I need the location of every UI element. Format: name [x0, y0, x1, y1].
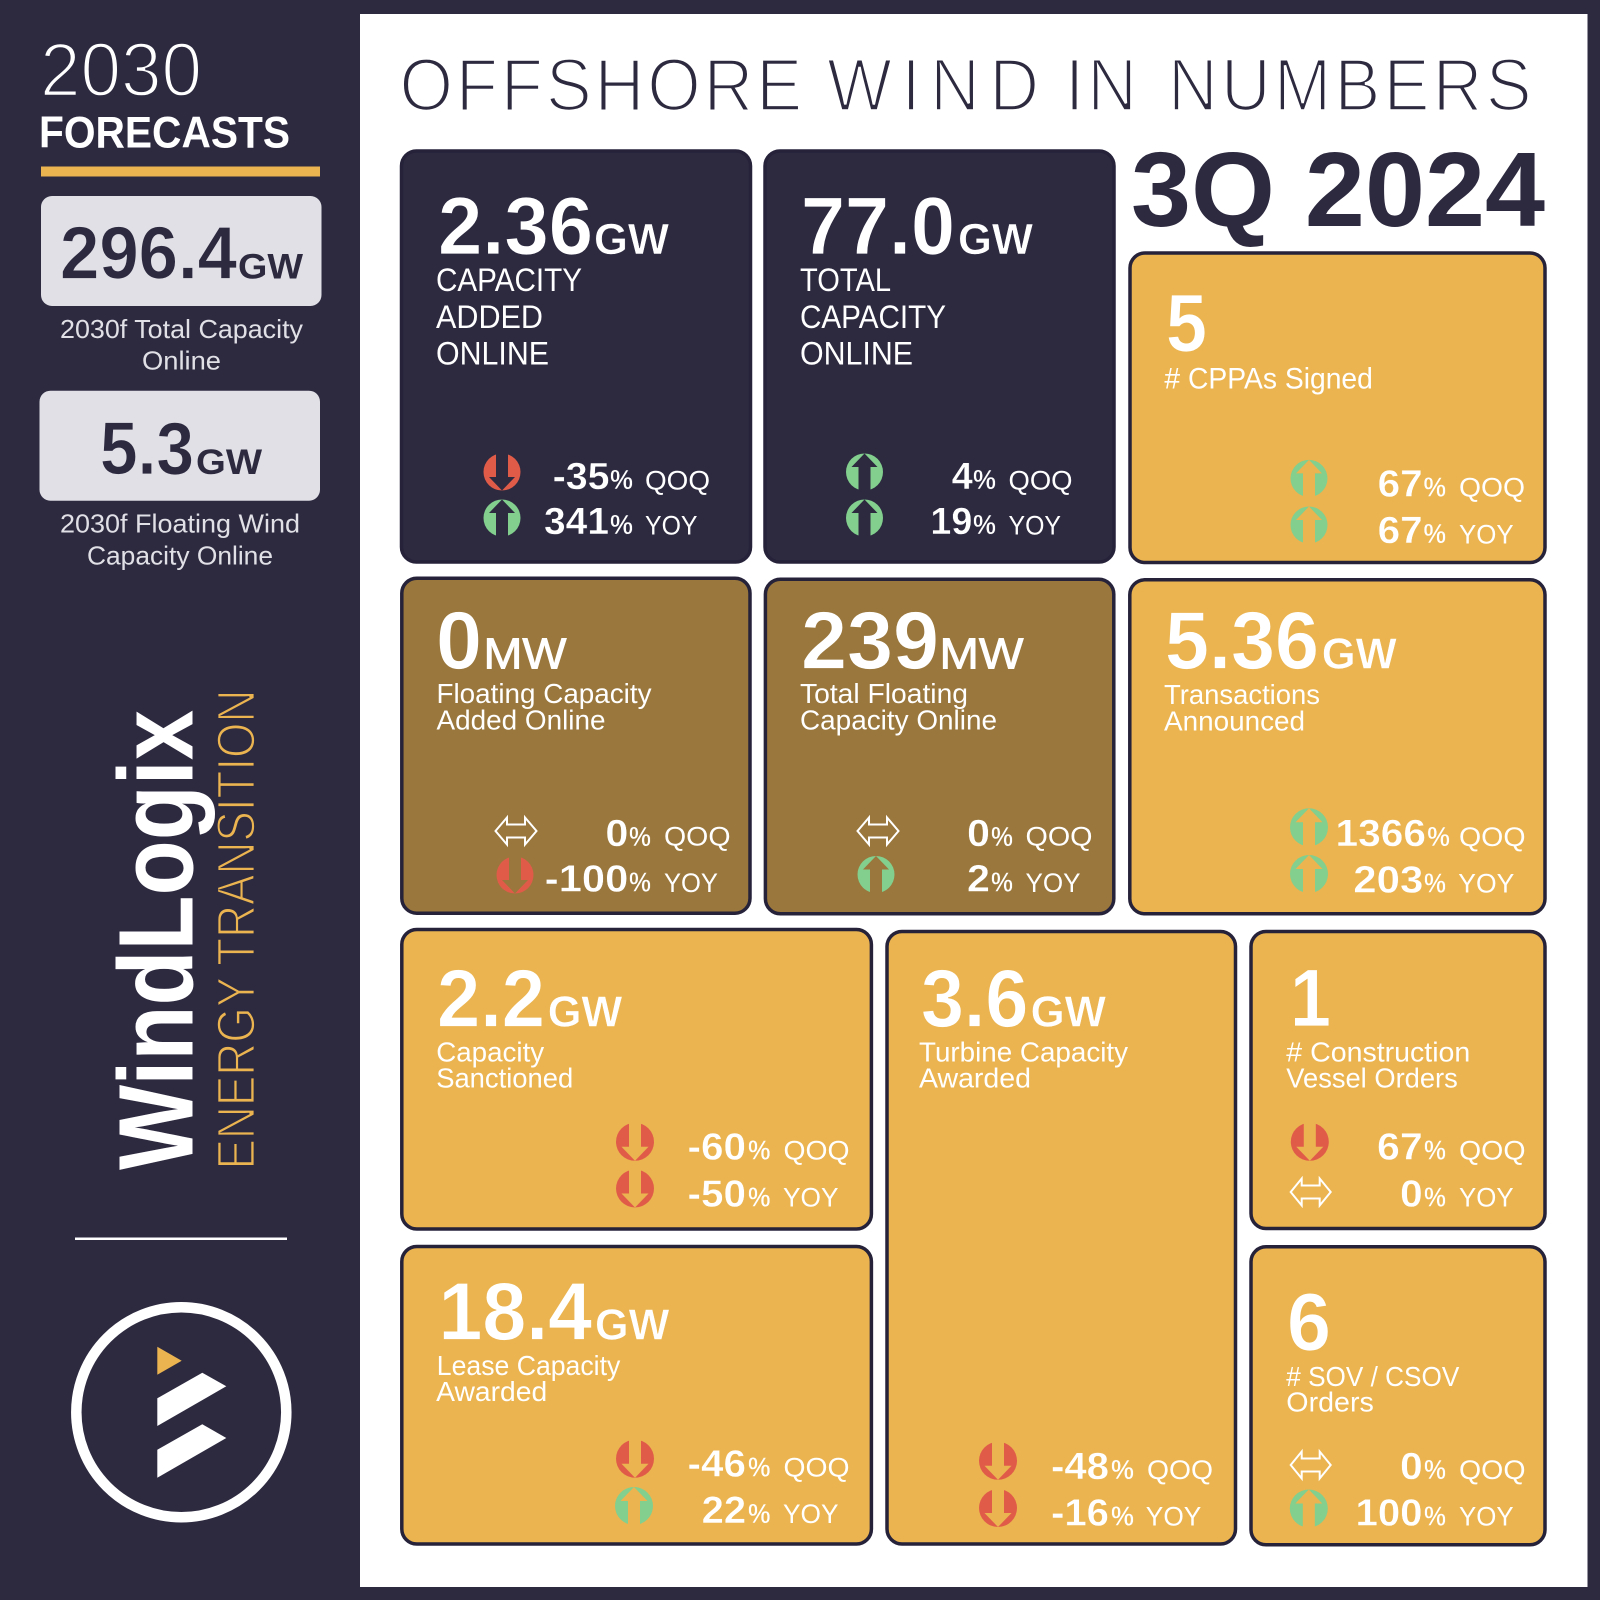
description — [436, 262, 582, 372]
description: Added Online — [436, 704, 606, 735]
title: NUMBERS — [1168, 44, 1532, 127]
value: GW — [1031, 988, 1106, 1036]
value: 239 — [801, 596, 939, 686]
YOY stat — [484, 500, 698, 543]
QOQ stat — [616, 1122, 850, 1168]
QOQ stat: % — [973, 464, 996, 495]
value: GW — [594, 215, 669, 264]
description: Total Floating — [800, 678, 968, 709]
YOY stat — [858, 856, 1080, 900]
description — [800, 678, 997, 735]
sidebar heading — [39, 28, 290, 157]
value: 77.0 — [801, 181, 955, 272]
QOQ stat: % — [1424, 1134, 1446, 1166]
forecast box: floating wind — [40, 391, 320, 501]
YOY stat: % — [991, 866, 1013, 898]
YOY stat: YOY — [1459, 1502, 1514, 1532]
value — [436, 596, 567, 686]
forecast caption: floating wind: 2030f Floating Wind — [60, 509, 300, 539]
YOY stat: YOY — [1459, 519, 1514, 549]
YOY stat: % — [1424, 868, 1446, 898]
title — [400, 44, 1532, 127]
panel: transactions announced — [1130, 580, 1545, 914]
value: 5.36 — [1165, 596, 1319, 686]
description: # CPPAs Signed — [1164, 362, 1373, 395]
description: CAPACITY — [800, 299, 946, 335]
sidebar heading: 2030 — [40, 28, 202, 113]
panel: total capacity online — [765, 151, 1114, 562]
YOY stat — [979, 1488, 1201, 1534]
description: CAPACITY — [436, 262, 582, 298]
QOQ stat: 0 — [967, 813, 990, 855]
description: Announced — [1164, 706, 1305, 737]
description: Capacity Online — [800, 704, 997, 735]
title: IN — [1065, 44, 1137, 127]
description — [1286, 1361, 1460, 1418]
QOQ stat: % — [1424, 472, 1446, 503]
forecast box: total capacity: 296.4 — [60, 212, 237, 295]
YOY stat: -50 — [688, 1173, 746, 1215]
value — [438, 181, 669, 272]
YOY stat: YOY — [783, 1499, 838, 1529]
QOQ stat: QOQ — [784, 1453, 850, 1483]
YOY stat: 2 — [967, 858, 990, 900]
panel: CPPAs signed — [1130, 253, 1545, 562]
YOY stat: YOY — [1459, 1182, 1514, 1212]
value: GW — [548, 988, 623, 1036]
brand wordmark — [98, 690, 266, 1170]
YOY stat — [1290, 506, 1514, 552]
YOY stat: % — [748, 1181, 771, 1212]
YOY stat — [1290, 855, 1514, 902]
description: TOTAL — [800, 262, 891, 298]
QOQ stat — [1291, 1446, 1526, 1488]
YOY stat: % — [1424, 1181, 1446, 1212]
value: 18.4 — [438, 1267, 592, 1358]
YOY stat — [496, 856, 718, 900]
QOQ stat: 67 — [1378, 464, 1423, 506]
panel: SOV / CSOV orders — [1251, 1247, 1545, 1545]
forecast box: floating wind: GW — [196, 443, 262, 482]
value — [801, 181, 1033, 272]
panel: construction vessel orders — [1251, 932, 1545, 1228]
description: ONLINE — [436, 336, 549, 372]
title: WIND — [827, 44, 1039, 127]
value: MW — [940, 630, 1024, 678]
QOQ stat: 67 — [1377, 1126, 1423, 1168]
QOQ stat — [1290, 808, 1526, 855]
value: 2.36 — [438, 181, 593, 272]
YOY stat: 19 — [930, 501, 972, 543]
YOY stat — [615, 1487, 838, 1532]
description: Capacity — [436, 1036, 544, 1068]
sidebar heading: FORECASTS — [39, 108, 290, 157]
QOQ stat — [979, 1441, 1213, 1488]
QOQ stat — [1291, 1122, 1526, 1168]
value: 5 — [1166, 278, 1207, 369]
YOY stat: YOY — [1026, 868, 1080, 898]
YOY stat — [846, 500, 1061, 543]
value: GW — [595, 1301, 670, 1350]
YOY stat: YOY — [664, 868, 718, 898]
QOQ stat: -35 — [553, 456, 610, 498]
YOY stat: YOY — [1458, 868, 1514, 898]
YOY stat: -16 — [1051, 1492, 1109, 1534]
QOQ stat: % — [748, 1134, 771, 1166]
value: 1 — [1290, 953, 1331, 1044]
YOY stat — [616, 1169, 838, 1215]
YOY stat: YOY — [1008, 510, 1061, 540]
QOQ stat: QOQ — [1459, 1136, 1526, 1166]
QOQ stat: 0 — [1400, 1446, 1423, 1488]
value: 6 — [1287, 1277, 1331, 1368]
QOQ stat: QOQ — [645, 466, 710, 496]
panel: capacity added online — [402, 151, 750, 562]
panel: capacity sanctioned — [402, 930, 871, 1229]
value — [801, 596, 1024, 686]
description: Vessel Orders — [1286, 1062, 1458, 1093]
brand wordmark: ENERGY TRANSITION — [206, 690, 266, 1170]
value: 0 — [436, 596, 482, 686]
description — [919, 1036, 1128, 1093]
panel: floating capacity added online — [402, 578, 750, 913]
value — [437, 954, 623, 1044]
brand logo — [76, 1307, 286, 1517]
QOQ stat: -46 — [688, 1444, 746, 1486]
QOQ stat — [616, 1439, 850, 1486]
QOQ stat: % — [610, 464, 633, 495]
panel: turbine capacity awarded — [887, 932, 1236, 1544]
value: 3.6 — [921, 954, 1028, 1044]
period heading: 3Q 2024 — [1131, 131, 1545, 249]
description: ADDED — [436, 299, 543, 335]
description: Transactions — [1164, 679, 1320, 710]
YOY stat: 203 — [1353, 860, 1423, 902]
description: Awarded — [436, 1376, 547, 1407]
QOQ stat: % — [1427, 821, 1450, 852]
forecast caption: total capacity: 2030f Total Capacity — [60, 314, 303, 344]
YOY stat: 0 — [1400, 1173, 1423, 1215]
value — [921, 954, 1106, 1044]
value — [1165, 596, 1397, 686]
YOY stat: % — [610, 509, 633, 540]
description — [436, 1350, 620, 1407]
QOQ stat: QOQ — [784, 1136, 850, 1166]
description — [1286, 1036, 1470, 1093]
forecast caption: floating wind — [60, 509, 300, 570]
QOQ stat: % — [629, 821, 651, 852]
QOQ stat: QOQ — [1147, 1455, 1213, 1485]
description: Orders — [1286, 1387, 1374, 1418]
QOQ stat: -60 — [688, 1126, 746, 1168]
YOY stat: 341 — [544, 501, 609, 543]
YOY stat: 67 — [1378, 510, 1423, 552]
main white panel — [360, 14, 1588, 1587]
title: OFFSHORE — [400, 44, 802, 127]
description: Floating Capacity — [436, 678, 652, 709]
description: ONLINE — [800, 336, 913, 372]
YOY stat: YOY — [645, 510, 698, 540]
forecast caption: floating wind: Capacity Online — [87, 540, 273, 570]
forecast caption: total capacity — [60, 314, 303, 375]
YOY stat — [1290, 1490, 1514, 1534]
QOQ stat: QOQ — [1026, 822, 1092, 852]
YOY stat — [1291, 1173, 1514, 1215]
sidebar: 2030 forecasts — [39, 28, 322, 570]
YOY stat: % — [629, 866, 651, 898]
description: # Construction — [1286, 1036, 1470, 1068]
YOY stat: % — [1111, 1500, 1134, 1532]
YOY stat: -100 — [545, 858, 628, 900]
description — [436, 1036, 573, 1093]
YOY stat: 22 — [702, 1490, 746, 1532]
description: Awarded — [919, 1062, 1031, 1093]
QOQ stat: QOQ — [1459, 822, 1526, 852]
brand wordmark: WindLogix — [98, 710, 216, 1170]
panel: total floating capacity online — [765, 579, 1114, 914]
description — [800, 262, 946, 372]
description: Sanctioned — [436, 1062, 573, 1093]
heading underline — [41, 166, 320, 176]
YOY stat: YOY — [783, 1182, 838, 1212]
QOQ stat: QOQ — [1459, 473, 1525, 503]
QOQ stat — [846, 454, 1072, 498]
YOY stat: % — [1424, 518, 1446, 549]
value: GW — [958, 215, 1033, 264]
panel: lease capacity awarded — [402, 1246, 871, 1544]
YOY stat: % — [973, 509, 996, 540]
QOQ stat: QOQ — [1008, 466, 1072, 496]
QOQ stat — [858, 813, 1092, 855]
QOQ stat: 4 — [952, 456, 973, 498]
QOQ stat: % — [1111, 1454, 1134, 1485]
QOQ stat: % — [748, 1452, 771, 1482]
YOY stat: % — [1424, 1500, 1446, 1532]
forecast caption: total capacity: Online — [142, 345, 221, 375]
YOY stat: YOY — [1146, 1502, 1201, 1532]
forecast box: floating wind: 5.3 — [100, 407, 194, 490]
QOQ stat — [484, 453, 710, 498]
YOY stat: % — [748, 1498, 771, 1529]
description — [436, 678, 652, 735]
QOQ stat: QOQ — [1459, 1455, 1526, 1485]
YOY stat: 100 — [1356, 1492, 1422, 1534]
QOQ stat: 1366 — [1336, 813, 1426, 855]
QOQ stat: % — [1424, 1454, 1446, 1485]
QOQ stat — [496, 813, 730, 855]
value: MW — [484, 630, 567, 678]
description: Turbine Capacity — [919, 1036, 1128, 1068]
forecast box: total capacity — [41, 196, 322, 306]
forecast box: total capacity: GW — [238, 248, 303, 287]
QOQ stat: -48 — [1051, 1446, 1109, 1488]
QOQ stat — [1290, 460, 1525, 506]
QOQ stat: QOQ — [664, 822, 730, 852]
QOQ stat: % — [991, 821, 1013, 852]
description: Lease Capacity — [437, 1350, 620, 1381]
value: 2.2 — [437, 954, 545, 1044]
description: # SOV / CSOV — [1286, 1361, 1460, 1392]
QOQ stat: 0 — [605, 813, 628, 855]
value — [438, 1267, 670, 1358]
value: GW — [1322, 630, 1397, 678]
description — [1164, 679, 1320, 737]
